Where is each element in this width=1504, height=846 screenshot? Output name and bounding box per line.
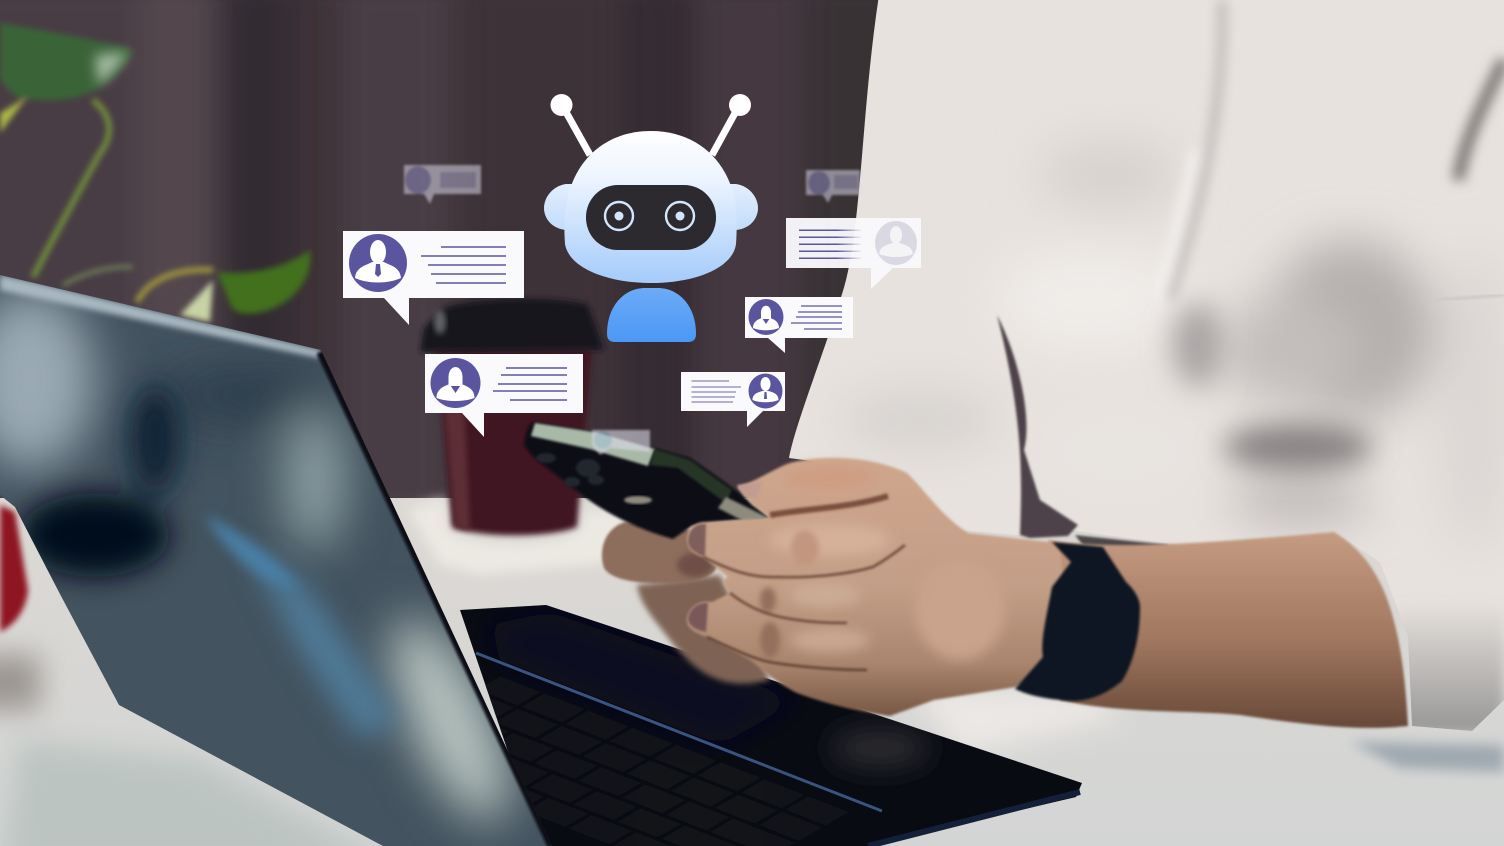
avatar: woman — [430, 358, 480, 408]
laptop keyboard deck — [460, 605, 1082, 846]
plant — [0, 23, 310, 322]
coffee cup — [408, 299, 640, 575]
left finger holding phone — [602, 522, 717, 583]
smartphone — [524, 422, 770, 539]
other hand fingers — [602, 522, 770, 684]
left eye — [605, 202, 633, 230]
text lines — [421, 247, 506, 283]
hand highlights — [770, 466, 1005, 660]
right antenna — [712, 94, 751, 155]
text lines — [791, 306, 842, 329]
laptop lid — [0, 270, 560, 846]
robot chatbot icon — [544, 94, 758, 342]
left antenna — [550, 94, 590, 155]
chat bubble: large left — [343, 231, 524, 325]
chat bubble: middle right — [745, 297, 853, 353]
left ear — [544, 184, 572, 230]
red object — [0, 505, 28, 632]
faint chat bubble: top left — [404, 165, 481, 204]
visor — [586, 185, 716, 250]
text lines — [692, 381, 741, 402]
avatar: man — [748, 374, 782, 408]
chat bubble: lower left — [425, 354, 583, 437]
hand silhouette — [687, 458, 1063, 716]
gap between sleeve and torso — [997, 315, 1168, 556]
finger creases — [703, 496, 905, 670]
right arm — [1048, 532, 1408, 728]
finger knuckle shading — [760, 530, 819, 658]
avatar: woman — [748, 299, 784, 335]
robot body — [607, 288, 696, 342]
finger nails — [688, 482, 762, 632]
right eye — [666, 202, 694, 230]
faint chat bubble: over phone — [592, 430, 650, 455]
avatar: man — [349, 234, 407, 292]
keyboard keys — [486, 676, 848, 846]
table — [0, 498, 1504, 846]
cup body — [437, 350, 592, 535]
shirt — [780, 0, 1504, 755]
text lines — [799, 230, 862, 259]
robot head — [564, 131, 737, 283]
right ear — [730, 184, 758, 230]
faint chat bubble: top right — [806, 170, 860, 203]
hand — [687, 458, 1063, 716]
text lines — [493, 368, 567, 400]
cup lid — [420, 299, 604, 352]
lower left fingers — [637, 575, 770, 684]
avatar: faded man — [875, 221, 917, 265]
saucer — [408, 498, 640, 575]
smartwatch — [1015, 542, 1140, 701]
chat bubble: lower right — [681, 372, 785, 427]
chat bubble: upper right — [786, 218, 921, 289]
